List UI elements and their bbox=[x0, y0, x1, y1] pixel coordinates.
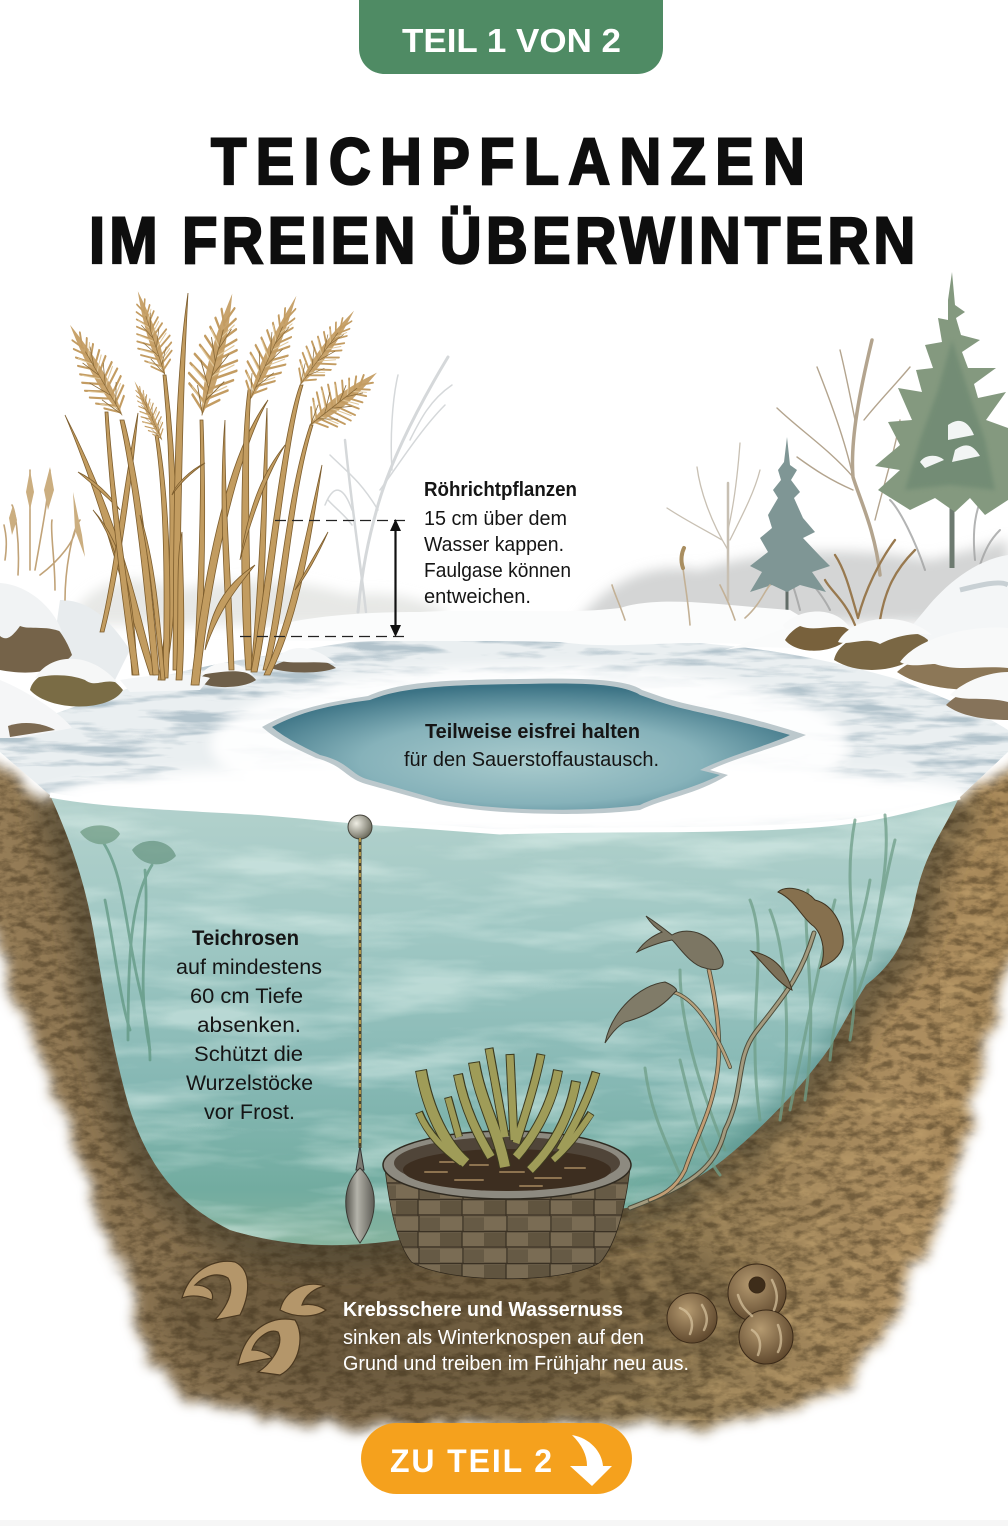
dark water near right slope bbox=[647, 938, 903, 1198]
right underwater grasses bbox=[645, 815, 895, 1175]
label: winter buds: Krebsschere und Wassernuss bbox=[343, 1299, 623, 1321]
small conifer bbox=[750, 437, 830, 614]
label: reed plants: Röhrichtpflanzen bbox=[424, 479, 577, 501]
frozen ice sheet bbox=[0, 635, 1008, 835]
stems bbox=[630, 933, 814, 1208]
hazy distant forest bbox=[75, 540, 1008, 625]
title bbox=[89, 126, 915, 278]
label: ice free area: Teilweise eisfrei halten bbox=[425, 721, 640, 743]
snow at reed base bbox=[120, 675, 210, 692]
label: water lilies: 60 cm Tiefe bbox=[190, 985, 303, 1008]
button: to part 2 bbox=[361, 1423, 632, 1494]
reed plumes bbox=[53, 286, 390, 444]
far-right dark shrubs bbox=[775, 490, 1000, 610]
label: winter buds: Grund und treiben im Frühjahr neu aus. bbox=[343, 1353, 689, 1375]
label: ice free area bbox=[404, 721, 659, 771]
label: winter buds bbox=[343, 1299, 689, 1375]
label: reed plants: 15 cm über dem bbox=[424, 508, 567, 530]
top tab: part 1 of 2 bbox=[359, 0, 663, 74]
rock moss bbox=[30, 667, 123, 706]
reed blades bbox=[65, 293, 328, 685]
dark floor and bank shading bbox=[160, 1220, 760, 1400]
cut-height measurement bbox=[240, 519, 410, 637]
rock front left bbox=[0, 680, 72, 738]
label: reed plants: Faulgase können bbox=[424, 560, 571, 582]
label: water lilies: Wurzelstöcke bbox=[186, 1072, 313, 1095]
open water hole bbox=[262, 679, 806, 814]
top tab: part 1 of 2: TEIL 1 VON 2 bbox=[402, 22, 621, 59]
label: water lilies: Schützt die bbox=[194, 1043, 303, 1066]
label: water lilies: vor Frost. bbox=[204, 1101, 295, 1124]
label: reed plants: entweichen. bbox=[424, 586, 531, 608]
icon: curved down arrow bbox=[570, 1435, 612, 1486]
reed clump with plumes bbox=[53, 286, 390, 685]
rock 2 bbox=[834, 630, 928, 670]
rock 3 bbox=[897, 646, 1008, 690]
faint bare tree behind label bbox=[325, 357, 452, 612]
dry shrubs on far bank bbox=[612, 548, 770, 625]
rock 4 bbox=[946, 684, 1008, 720]
label: winter buds: sinken als Winterknospen auf den bbox=[343, 1327, 644, 1349]
label: ice free area: für den Sauerstoffaustausch. bbox=[404, 749, 659, 771]
leaves bbox=[637, 916, 723, 970]
soil bbox=[403, 1149, 611, 1191]
label: reed plants bbox=[424, 479, 577, 608]
left snow banks and rocks bbox=[0, 583, 336, 738]
soil cross-section bbox=[0, 740, 1008, 1460]
rope bbox=[358, 838, 362, 1148]
small dry reeds left bbox=[4, 467, 85, 600]
float ball bbox=[348, 815, 372, 839]
rock in reeds bbox=[198, 669, 256, 687]
title: IM FREIEN ÜBERWINTERN bbox=[89, 205, 915, 278]
lead weight bbox=[356, 1146, 364, 1170]
label: water lilies bbox=[176, 927, 322, 1124]
button: to part 2: ZU TEIL 2 bbox=[390, 1443, 552, 1479]
right snow banks and rocks bbox=[725, 555, 1008, 720]
label: water lilies: absenken. bbox=[197, 1014, 301, 1037]
ice underside edge bbox=[50, 795, 960, 832]
bare tree middle bbox=[667, 443, 760, 600]
cut stems bbox=[419, 1048, 596, 1170]
label: water lilies: auf mindestens bbox=[176, 956, 322, 979]
title: TEICHPFLANZEN bbox=[211, 126, 805, 199]
label: reed plants: Wasser kappen. bbox=[424, 534, 564, 556]
label: water lilies: Teichrosen bbox=[192, 927, 299, 950]
rock 1 bbox=[785, 621, 852, 651]
bare tree right bbox=[777, 340, 910, 575]
bushes near right rocks bbox=[825, 540, 915, 625]
left lily plants underwater bbox=[80, 825, 176, 1060]
planting basket bbox=[380, 1048, 635, 1285]
basket body bbox=[385, 1165, 630, 1278]
pond water bbox=[40, 790, 970, 1260]
rock right of reeds bbox=[270, 658, 336, 672]
crab claw winter buds bbox=[182, 1261, 326, 1375]
water chestnuts bbox=[667, 1264, 793, 1364]
plumb line with weight bbox=[346, 815, 374, 1243]
far snow bank bbox=[240, 602, 840, 645]
basket rim bbox=[383, 1131, 631, 1199]
right aquatic plant with leaves bbox=[605, 888, 843, 1208]
large conifer bbox=[875, 272, 1008, 568]
rock large bbox=[0, 607, 72, 673]
